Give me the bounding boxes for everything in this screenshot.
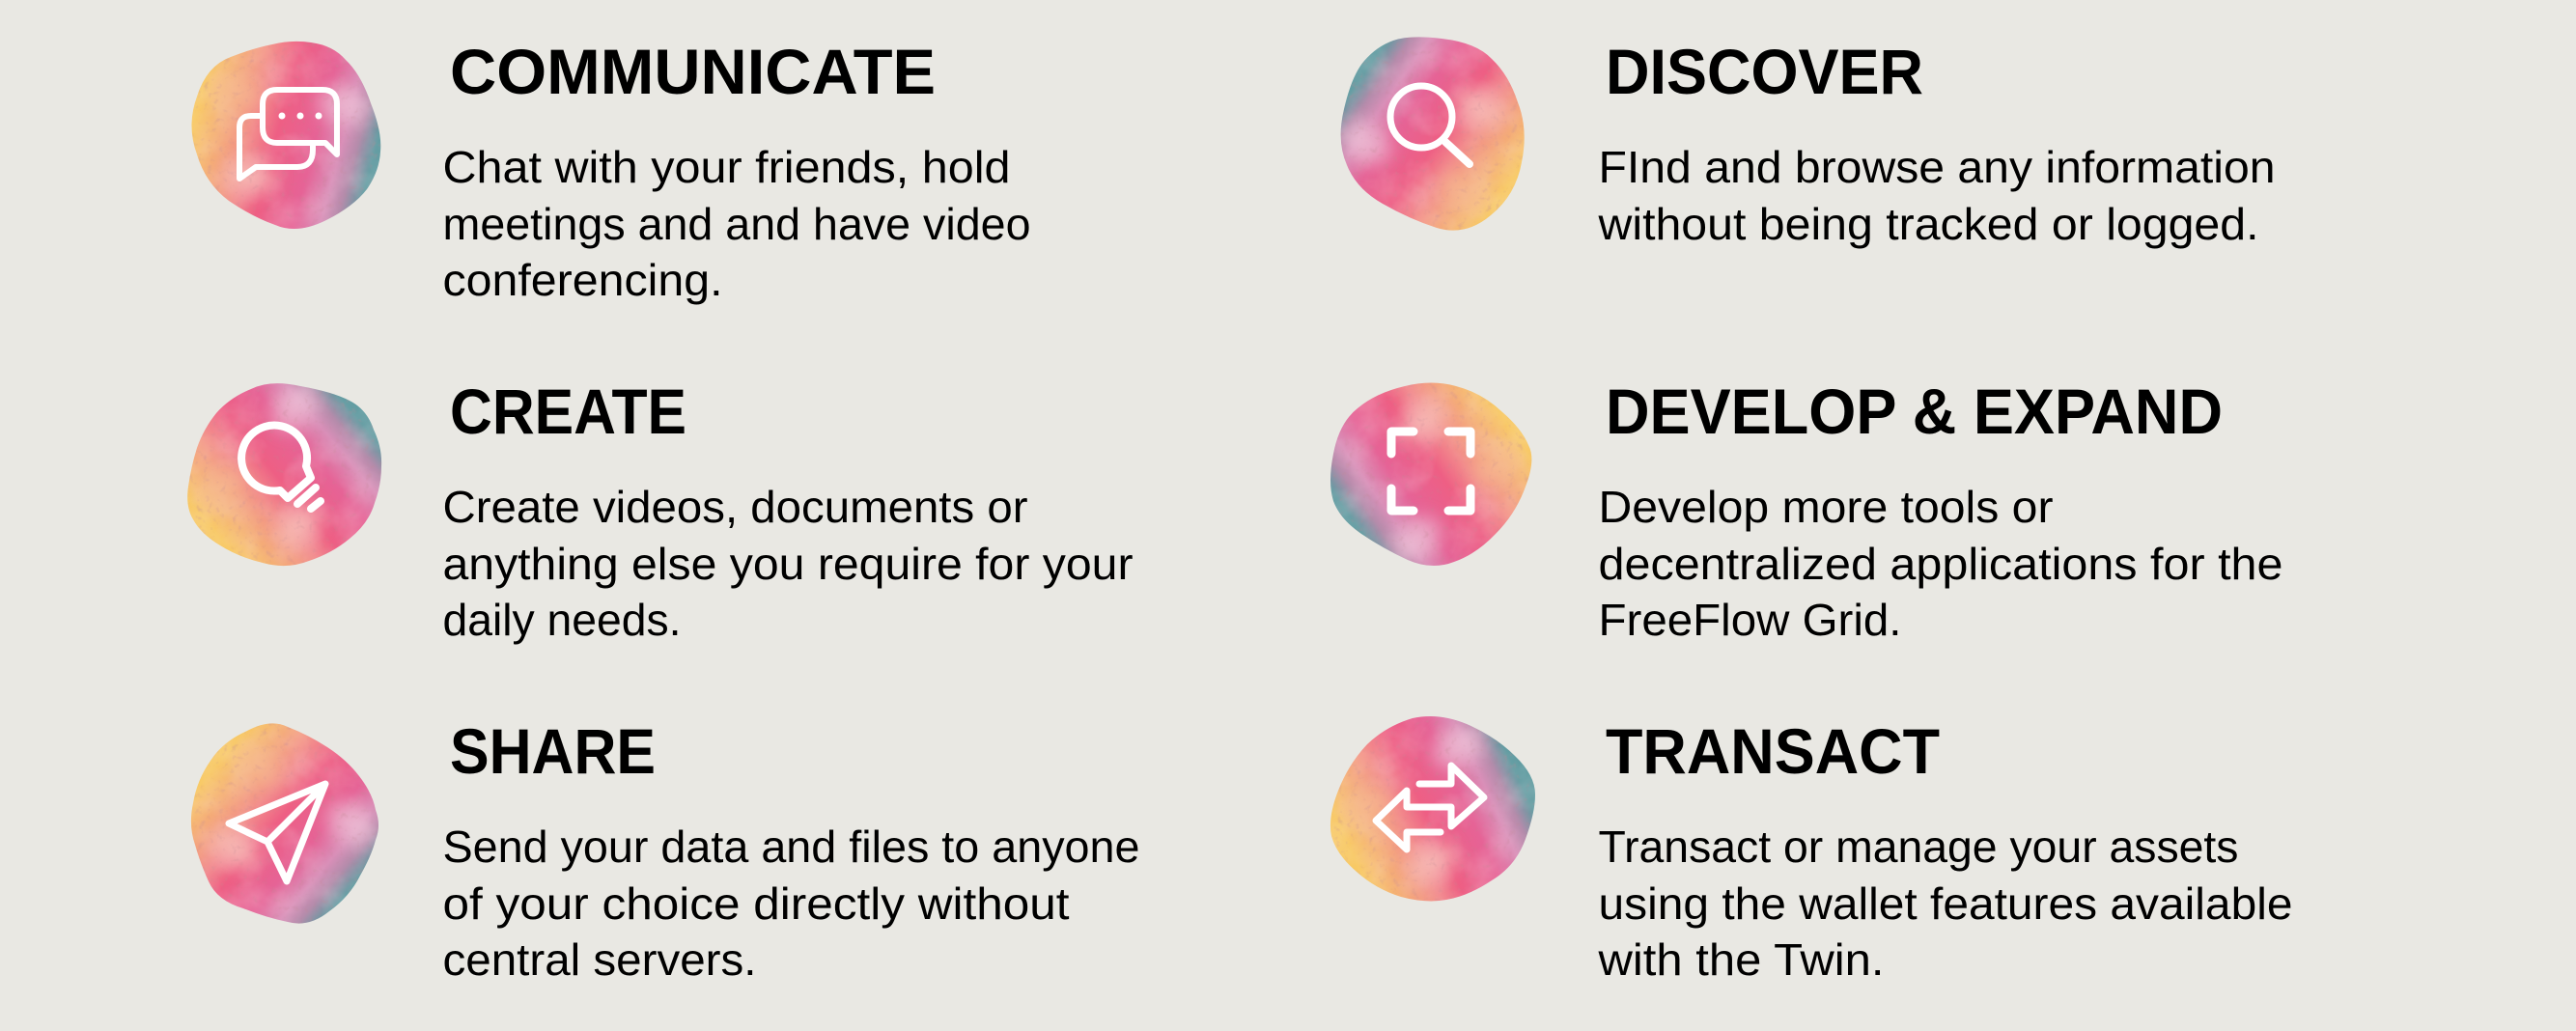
icon: share blob with paper plane <box>191 723 378 924</box>
text: share description <box>442 822 1139 985</box>
heading: create: CREATE <box>450 376 686 447</box>
panel: share <box>191 723 1137 975</box>
icon: develop blob with expand brackets <box>1330 382 1531 566</box>
icon: communicate blob with chat bubbles <box>191 41 380 229</box>
heading: transact: TRANSACT <box>1606 715 1940 787</box>
heading: share: SHARE <box>450 715 656 787</box>
panel: transact <box>1330 716 2290 975</box>
panel: discover <box>1340 37 2273 249</box>
text: transact description <box>1597 822 2292 985</box>
text: transact description: with the Twin. <box>1597 934 1885 985</box>
text: transact description: Transact or manage your assets <box>1599 822 2238 872</box>
text: create description: anything else you require for your <box>442 539 1134 589</box>
text: discover description <box>1597 142 2275 249</box>
text: develop description: FreeFlow Grid. <box>1599 595 1902 645</box>
icon: create blob with light bulb <box>187 383 382 566</box>
text: share description: central servers. <box>442 934 757 985</box>
text: communicate description: meetings and and have video <box>442 199 1031 249</box>
heading: discover: DISCOVER <box>1606 36 1923 107</box>
panel: communicate <box>191 41 1029 305</box>
icon: transact blob with exchange arrows <box>1330 716 1535 902</box>
text: discover description: FInd and browse any information <box>1599 142 2275 192</box>
text: develop description <box>1599 482 2282 645</box>
heading: develop and expand: DEVELOP & EXPAND <box>1606 376 2223 447</box>
text: communicate description <box>442 142 1031 305</box>
text: develop description: decentralized applications for the <box>1599 539 2282 589</box>
text: communicate description: conferencing. <box>442 255 722 305</box>
panel: develop and expand <box>1330 382 2281 636</box>
text: share description: Send your data and files to anyone <box>442 822 1139 872</box>
text: create description: daily needs. <box>442 595 682 645</box>
text: create description <box>442 482 1134 645</box>
text: transact description: using the wallet features available <box>1599 878 2292 929</box>
text: develop description: Develop more tools or <box>1599 482 2053 532</box>
text: share description: of your choice directly without <box>442 878 1070 929</box>
text: discover description: without being tracked or logged. <box>1597 199 2259 249</box>
text: communicate description: Chat with your friends, hold <box>442 142 1010 192</box>
heading: communicate: COMMUNICATE <box>450 36 936 107</box>
panel: create <box>187 383 1133 645</box>
icon: discover blob with magnifier <box>1340 37 1525 231</box>
text: create description: Create videos, documents or <box>442 482 1027 532</box>
